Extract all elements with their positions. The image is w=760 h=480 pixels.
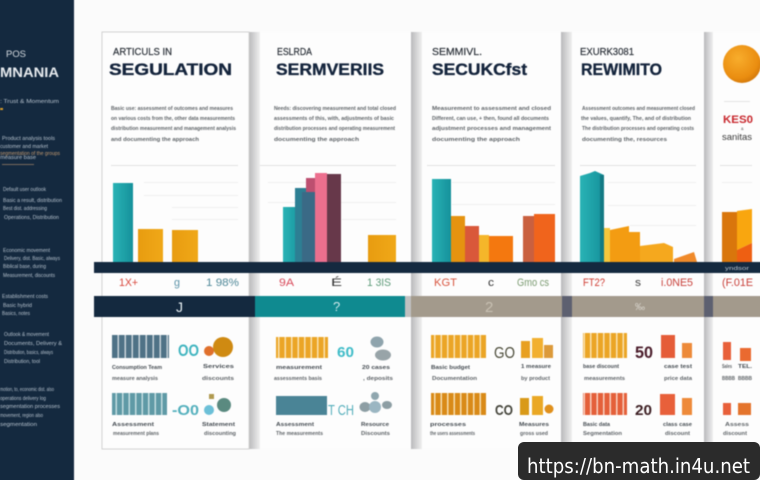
chart value labels: c xyxy=(488,277,495,289)
panel 3 row 1: Documentation xyxy=(432,376,478,382)
panel 1 body text: and documenting the approach xyxy=(111,137,200,143)
sidebar text blocks: customer and market xyxy=(0,144,48,150)
panel 1 heading: SEGULATION xyxy=(109,60,232,79)
sidebar text blocks: operations delivery log xyxy=(0,396,46,402)
panel 4 body text: documenting the, resources xyxy=(582,137,667,143)
panel 1 row 2: measurement plans xyxy=(113,431,159,437)
panel 1 heading: ARTICULS IN xyxy=(113,47,172,58)
panel 1 row 1: OO xyxy=(178,341,199,360)
panel 2 row 2: Resource xyxy=(361,422,389,428)
panel 3 row 1: GO xyxy=(494,345,515,362)
sidebar text blocks: Distribution, basics, always xyxy=(4,350,53,356)
sidebar text blocks: Basics, notes xyxy=(2,311,30,317)
panel 1 row 1: discounts xyxy=(202,376,234,382)
sidebar heading: MNANIA xyxy=(0,64,59,80)
panel 5 bar chart xyxy=(722,209,752,262)
sidebar xyxy=(0,0,74,480)
panel 3 body text: Different, can use, + then, found all documents xyxy=(432,116,549,122)
sidebar text blocks: Distribution, tool xyxy=(4,359,40,365)
panel 3 body text: Measurement to assessment and closed xyxy=(432,106,551,112)
panel 2 body text: assessments of this, with, adjustments of basic xyxy=(274,116,394,122)
panel 5 row 2: Assess xyxy=(725,422,749,428)
sidebar text blocks: Delivery, dist. Basic, always xyxy=(4,256,60,262)
panel 2 row 1: assessments basis xyxy=(274,376,322,382)
sidebar text blocks: movement, region also xyxy=(0,413,43,419)
panel 2 row 2: Assessment xyxy=(276,422,314,428)
panel 4 row 1 xyxy=(583,333,693,382)
panel 5 row 1 xyxy=(722,342,753,382)
sidebar text blocks: Biblical base, during xyxy=(3,264,46,270)
panel 4 body text: The distribution processes and operating costs xyxy=(582,126,694,132)
panel: services xyxy=(260,32,411,449)
chart value labels: (F.01E xyxy=(722,277,753,289)
chart value labels: 1 3IS xyxy=(367,277,391,289)
section band: 2 xyxy=(485,299,493,316)
panel 3 row 1: 1 measure xyxy=(521,364,551,370)
sidebar text blocks: Establishment costs xyxy=(2,294,48,300)
sidebar heading: POS xyxy=(6,49,26,60)
panel 4 row 2: Segmentation xyxy=(583,431,623,437)
panel 2 heading: ESLRDA xyxy=(277,47,312,58)
panel 5 row 1: TEL. xyxy=(738,364,753,370)
panel 4 row 2: class case xyxy=(663,422,692,428)
panel 5 row 1: BBBB xyxy=(722,376,735,382)
section band: ? xyxy=(333,299,340,314)
chart value labels: i.0NE5 xyxy=(661,277,693,289)
panel 1 body text: distribution measurement and management analysis xyxy=(111,126,236,132)
chart value labels: 1 98% xyxy=(206,277,239,289)
panel 1 row 1: Consumption Team xyxy=(112,365,162,371)
panel 5 row 1: BBBB xyxy=(738,376,752,382)
panel 4 heading: EXURK3081 xyxy=(580,47,634,58)
panel 2 row 1: 20 cases xyxy=(362,365,390,371)
panel 4 body text: Assessment outcomes and measurement closed xyxy=(582,106,695,112)
panel 3 row 1: by product xyxy=(521,376,550,382)
panel 4 heading xyxy=(580,47,662,79)
panel 3 body text: adjustment processes and management xyxy=(432,126,551,132)
panel 1 bar chart xyxy=(113,183,198,262)
panel 2 row 1: measurement xyxy=(276,365,322,371)
sidebar text blocks: Best dist. addressing xyxy=(3,206,47,212)
panel 2 body text: distribution processes and operating measurement xyxy=(274,126,395,132)
sidebar text blocks: Measurement, discounts xyxy=(3,273,55,279)
panel 2 row 1: 60 xyxy=(337,344,354,361)
panel 5 label: KES0 xyxy=(723,114,753,126)
section band: ‰ xyxy=(635,302,645,313)
panel 1 heading xyxy=(109,47,232,79)
panel: segmentation xyxy=(102,32,249,449)
chart value labels: 1X+ xyxy=(119,277,138,289)
navy axis band xyxy=(94,262,760,273)
section band: J xyxy=(176,299,183,315)
panel shadows xyxy=(249,32,713,449)
panel 4 row 2 xyxy=(583,393,692,437)
panel 1 row 1: measure analysis xyxy=(112,376,158,382)
panel 2 row 1 xyxy=(274,336,393,382)
panel: securities xyxy=(422,32,561,449)
panel 3 row 1 xyxy=(431,335,553,382)
panel 4 bar chart xyxy=(580,171,697,262)
panel 5 label: sanitas xyxy=(722,132,753,142)
panel 1 row 1: Services xyxy=(203,364,234,370)
panel 2 row 2 xyxy=(276,392,392,437)
panel 3 heading: SEMMIVL. xyxy=(432,47,482,58)
chart value labels: FT2? xyxy=(583,277,605,289)
panel 2 body text xyxy=(274,106,396,143)
sidebar heading xyxy=(0,49,59,80)
sidebar text blocks: Economic movement xyxy=(3,248,50,254)
panel 4 body text xyxy=(581,106,695,143)
panel 2 heading: SERMVERIIS xyxy=(276,60,384,79)
chart value labels: É xyxy=(331,276,342,289)
panel: rewinto xyxy=(572,32,704,449)
panel 5 label: & xyxy=(741,126,744,131)
panel 3 row 2: gross used xyxy=(520,431,548,437)
sidebar text blocks: segmentation xyxy=(0,422,37,428)
watermark url xyxy=(518,442,760,480)
sidebar text blocks: Outlook & movement xyxy=(4,332,49,338)
panel 3 row 2: processes xyxy=(430,422,466,428)
chart value labels: KGT xyxy=(434,277,457,289)
panel 2 body text: documenting the approach xyxy=(274,137,360,143)
sidebar text blocks: segmentation processes xyxy=(0,404,60,410)
sidebar text blocks: measure base xyxy=(0,155,36,161)
sidebar text blocks: Basic hybrid xyxy=(3,303,32,309)
panel 3 row 2: the users assessments xyxy=(430,431,475,437)
sidebar text blocks: : Trust & Momentum xyxy=(0,99,59,105)
panel 3 row 1: Basic budget xyxy=(431,365,470,371)
panel 5 label xyxy=(722,114,753,142)
panel 3 row 2 xyxy=(430,393,554,437)
panel 5 row 1: Sales xyxy=(722,364,732,370)
panel 2 bar chart xyxy=(283,173,396,262)
sidebar text blocks: Operations, Distribution xyxy=(4,215,59,221)
panel 2 body text: Needs: discovering measurement and total closed xyxy=(274,106,396,112)
sidebar text blocks: Documents, Delivery & xyxy=(4,341,62,347)
sidebar text blocks xyxy=(0,99,62,428)
panel 3 body text xyxy=(432,106,551,143)
panel 4 row 1: case test xyxy=(664,364,692,370)
panel 1 row 2 xyxy=(112,393,236,437)
navy axis band: yndsor xyxy=(725,266,750,272)
panel 3 body text: documenting the approach xyxy=(432,137,521,143)
sidebar text blocks: Product analysis tools xyxy=(2,136,55,142)
panel 2 row 2: T CH xyxy=(328,402,354,419)
section band xyxy=(94,296,760,317)
chart value labels xyxy=(119,276,753,289)
panel 3 row 2: CO xyxy=(495,402,513,419)
panel 4 row 2: 20 xyxy=(635,402,652,419)
panel 1 body text: Basic use: assessment of outcomes and measures xyxy=(111,106,233,112)
chart value labels: s xyxy=(635,277,642,289)
panel 2 row 1: , deposits xyxy=(363,376,393,382)
panel 4 row 1: price data xyxy=(664,376,693,382)
panel 4 body text: the values, quantify, The, and of distribution xyxy=(581,116,692,122)
panel 3 row 2: Measures xyxy=(519,422,549,428)
panel 1 row 2: Statement xyxy=(202,422,235,428)
panel: partial right panel xyxy=(713,32,760,449)
sidebar text blocks: Default user outlook xyxy=(3,187,46,193)
panel 1 body text xyxy=(111,106,236,143)
sidebar text blocks: motion, to, economic dist. also xyxy=(0,387,54,393)
sidebar text blocks: segmentation of the groups xyxy=(0,151,60,157)
chart value labels: Gmo cs xyxy=(517,277,549,289)
chart value labels: 9A xyxy=(279,277,295,289)
chart value labels: g xyxy=(174,277,180,289)
panel 1 row 2: Assessment xyxy=(112,422,154,428)
icon: orange sphere xyxy=(723,45,760,83)
panel 4 row 2: discount xyxy=(665,431,690,437)
panel 3 heading xyxy=(432,47,527,79)
panel 4 heading: REWIMITO xyxy=(581,60,662,79)
panel 1 row 1 xyxy=(112,335,234,382)
panel 1 row 2: discounting xyxy=(204,431,236,437)
panel 1 body text: on various costs from the, other data measurements xyxy=(111,116,235,122)
panel 5 row 2: discount xyxy=(723,431,747,437)
panel 4 row 2: Basic data xyxy=(583,422,611,428)
panel 4 row 1: 50 xyxy=(635,343,653,362)
panel 5 row 2 xyxy=(723,403,751,437)
panel 4 row 1: measurements xyxy=(584,376,625,382)
panel 1 row 2: -O0 xyxy=(172,402,199,419)
panel 3 heading: SECUKCfst xyxy=(432,60,527,79)
sidebar text blocks: Basic a result, distribution xyxy=(3,198,62,204)
panel 4 row 1: base discount xyxy=(583,364,619,370)
panel 2 row 2: Discounts xyxy=(361,431,390,437)
panel 2 heading xyxy=(276,47,384,79)
panel 2 row 2: The measurements xyxy=(276,431,323,437)
panel 3 bar chart xyxy=(432,179,555,262)
